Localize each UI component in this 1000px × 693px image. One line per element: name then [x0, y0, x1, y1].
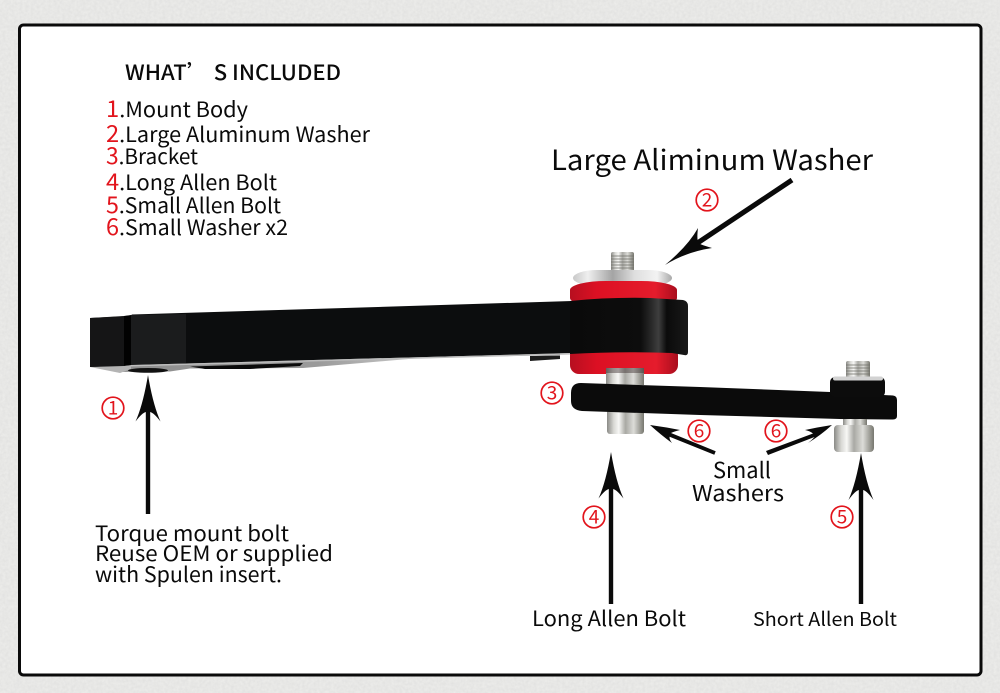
list item 1: 1.Mount Body	[106, 90, 248, 124]
parts list	[106, 90, 371, 242]
list item 3: 3.Bracket	[106, 137, 198, 171]
callout number 6 left	[688, 416, 710, 444]
top washer rim	[833, 376, 883, 380]
small bolt thread	[846, 361, 870, 379]
arrow: long bolt	[598, 452, 624, 604]
callout number 3	[541, 378, 563, 406]
list item 4: 4.Long Allen Bolt	[106, 163, 277, 197]
label: small washers	[692, 453, 784, 508]
mount arm	[90, 301, 572, 373]
list item 6: 6.Small Washer x2	[106, 208, 288, 242]
callout number 2: 2	[702, 186, 712, 212]
callout number 2	[696, 186, 718, 212]
callout number 4	[583, 502, 605, 530]
top washer	[830, 377, 885, 397]
arrow: torque mount	[136, 375, 160, 514]
callout number 6 right	[765, 416, 787, 444]
arm hub	[570, 298, 688, 355]
bracket	[571, 383, 897, 420]
callout number 5	[831, 502, 853, 530]
label: torque mount bolt	[95, 518, 333, 589]
callout number 1: 1	[108, 394, 118, 420]
callout number 1	[102, 394, 124, 420]
label: torque mount bolt: with Spulen insert.	[95, 559, 282, 589]
callout number 3: 3	[547, 378, 557, 406]
spacer	[606, 368, 644, 385]
heading: large aluminum washer: Large Aliminum Washer	[551, 139, 873, 179]
list item 5: 5.Small Allen Bolt	[106, 186, 281, 220]
label: torque mount bolt: Reuse OEM or supplied	[95, 538, 333, 568]
large aluminum washer	[573, 270, 672, 286]
arrow: left small washer	[650, 425, 716, 455]
label: small washers: Washers	[692, 476, 784, 508]
callout number 4: 4	[589, 502, 599, 530]
upper red bushing	[570, 281, 677, 307]
label: short allen bolt: Short Allen Bolt	[753, 605, 897, 632]
product photo: mount body and bracket	[90, 252, 897, 452]
small washer	[843, 419, 867, 426]
list item 2: 2.Large Aluminum Washer	[106, 115, 371, 149]
long bolt	[607, 406, 644, 434]
lower red bushing	[570, 346, 678, 374]
label: small washers: Small	[713, 453, 771, 485]
arrow: short bolt	[848, 453, 874, 604]
title: WHAT’ S INCLUDED	[125, 57, 341, 87]
arrow: right small washer	[766, 425, 832, 455]
label: long allen bolt: Long Allen Bolt	[532, 603, 686, 633]
callout number 6 right: 6	[771, 416, 781, 444]
callout number 5: 5	[837, 502, 847, 530]
label: torque mount bolt: Torque mount bolt	[95, 518, 289, 548]
threaded stud	[611, 252, 634, 273]
short bolt head	[834, 425, 874, 452]
arrow: washer	[665, 178, 793, 265]
callout number 6 left: 6	[694, 416, 704, 444]
